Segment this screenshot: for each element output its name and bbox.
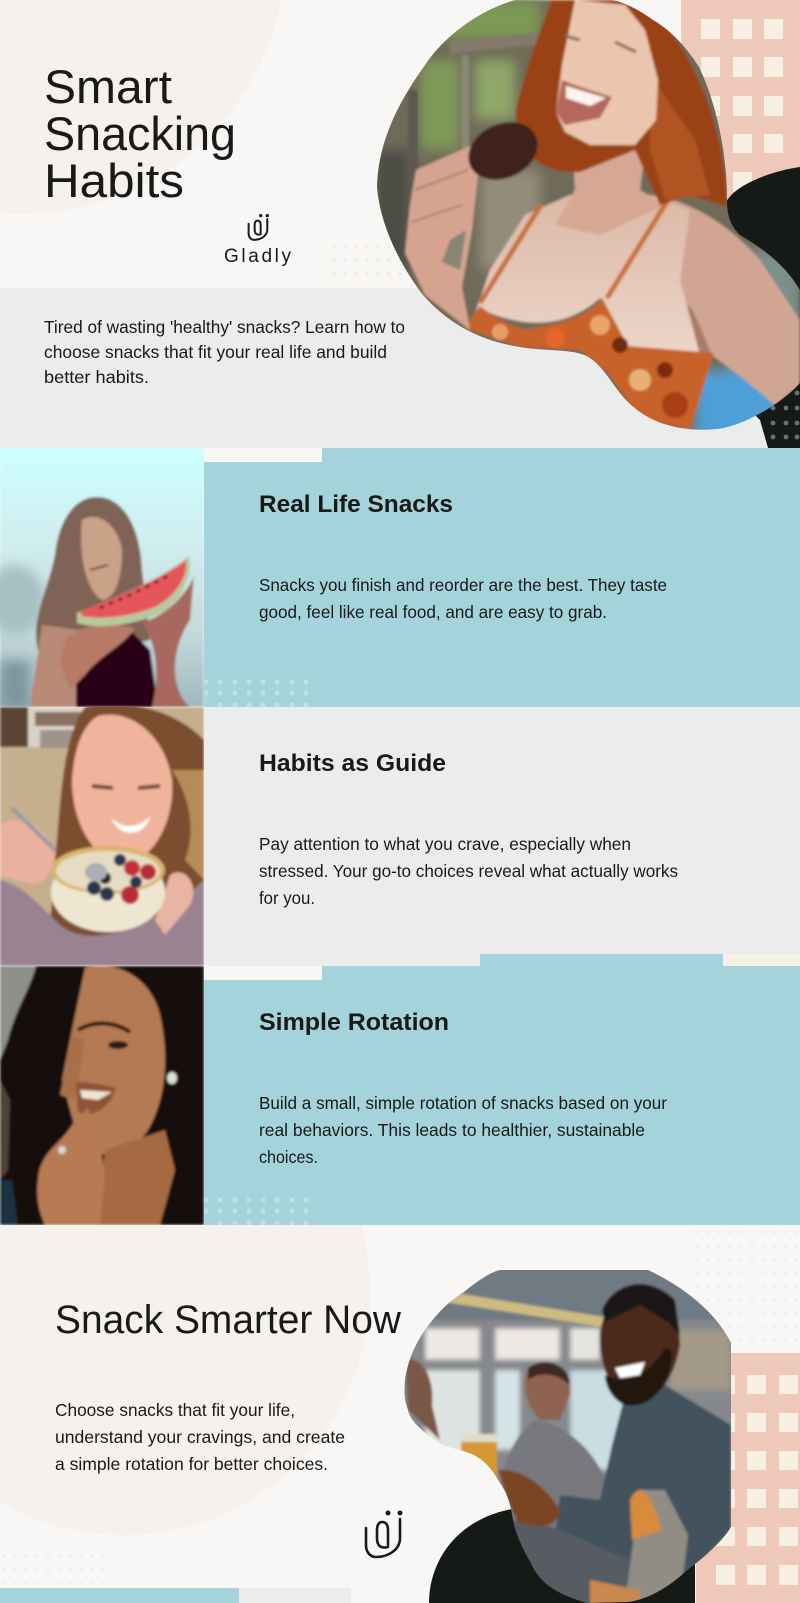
intro text xyxy=(44,317,405,387)
face xyxy=(81,517,122,600)
logo: Gladly xyxy=(224,215,292,267)
heading: Real Life Snacks: Real Life Snacks xyxy=(259,491,453,518)
title: Habits xyxy=(44,154,184,207)
footer body text: understand your cravings, and create xyxy=(55,1427,345,1447)
face xyxy=(62,966,165,1155)
arm left xyxy=(29,624,79,707)
intro text: Tired of wasting 'healthy' snacks? Learn how to xyxy=(44,317,405,337)
hand xyxy=(37,1108,105,1225)
dots: section 3 xyxy=(203,1197,309,1226)
title xyxy=(44,60,236,207)
black blob with dots: top xyxy=(724,167,800,448)
body: Simple Rotation xyxy=(259,1093,667,1167)
watermelon xyxy=(77,556,190,626)
arm and shoulder xyxy=(650,195,800,405)
photo: man with drink xyxy=(400,1265,735,1603)
blue and cream step above section 3 xyxy=(480,954,800,966)
title: Smart xyxy=(44,60,172,113)
black blob: footer xyxy=(429,1507,695,1603)
hands xyxy=(0,820,55,884)
footer body text: a simple rotation for better choices. xyxy=(55,1454,328,1474)
footer body text xyxy=(55,1400,345,1474)
intro text: choose snacks that fit your real life and build xyxy=(44,342,387,362)
panel: section 1 xyxy=(203,448,800,708)
panel: section 3 xyxy=(203,966,800,1226)
bottom strips xyxy=(0,1588,351,1603)
hand xyxy=(405,146,478,330)
hand xyxy=(498,1470,560,1526)
body: Habits as Guide xyxy=(259,834,678,908)
photo: woman eating nut xyxy=(0,966,204,1225)
face xyxy=(72,715,172,864)
face xyxy=(556,0,658,145)
head xyxy=(598,1303,682,1394)
heading: Habits as Guide: Habits as Guide xyxy=(259,750,446,777)
body: Simple Rotation: choices. xyxy=(259,1147,318,1167)
photo: woman with cookie xyxy=(370,0,800,440)
title: Snacking xyxy=(44,107,236,160)
body: Simple Rotation: Build a small, simple rotation of snacks based on your xyxy=(259,1093,667,1113)
heading: Simple Rotation: Simple Rotation xyxy=(259,1009,449,1036)
body: Habits as Guide: Pay attention to what you crave, especially when xyxy=(259,834,631,854)
top-left beige circle xyxy=(0,0,286,214)
chest xyxy=(470,195,700,355)
bowl xyxy=(50,877,166,934)
dots: footer patterns xyxy=(0,1225,800,1588)
sweater xyxy=(0,880,204,966)
body: Real Life Snacks: good, feel like real food, and are easy to grab. xyxy=(259,602,607,622)
dots: top pattern xyxy=(328,235,413,287)
logo icon: footer xyxy=(366,1512,401,1557)
hand and forearm xyxy=(60,624,135,690)
neck xyxy=(556,148,662,236)
panel: section 2 xyxy=(204,707,800,966)
bottle and garnish xyxy=(625,1490,688,1603)
body: Habits as Guide: stressed. Your go-to choices reveal what actually works xyxy=(259,861,678,881)
beer glass xyxy=(460,1440,499,1480)
photo: woman with watermelon xyxy=(0,448,204,710)
pink square panel: top xyxy=(681,0,800,260)
body: Simple Rotation: real behaviors. This leads to healthier, sustainable xyxy=(259,1120,645,1140)
logo: Gladly: Gladly xyxy=(224,246,292,267)
left person xyxy=(405,1359,440,1440)
man torso xyxy=(556,1385,731,1580)
body: Real Life Snacks xyxy=(259,575,667,622)
hair xyxy=(36,497,150,660)
chest and neck xyxy=(95,1130,175,1225)
dress xyxy=(464,298,714,430)
photo: woman with bowl xyxy=(0,704,204,966)
intro text: better habits. xyxy=(44,367,149,387)
footer body text: Choose snacks that fit your life, xyxy=(55,1400,295,1420)
footer heading: Snack Smarter Now xyxy=(55,1298,401,1342)
middle person xyxy=(502,1420,605,1528)
dots: section 1 xyxy=(203,679,309,708)
top xyxy=(76,625,158,707)
body: Real Life Snacks: Snacks you finish and reorder are the best. They taste xyxy=(259,575,667,595)
body: Habits as Guide: for you. xyxy=(259,888,315,908)
cookie xyxy=(467,121,539,181)
grey intro band xyxy=(0,288,800,448)
hair xyxy=(516,0,727,207)
footer beige circle xyxy=(0,1225,370,1535)
pink square panel: footer xyxy=(696,1353,800,1603)
